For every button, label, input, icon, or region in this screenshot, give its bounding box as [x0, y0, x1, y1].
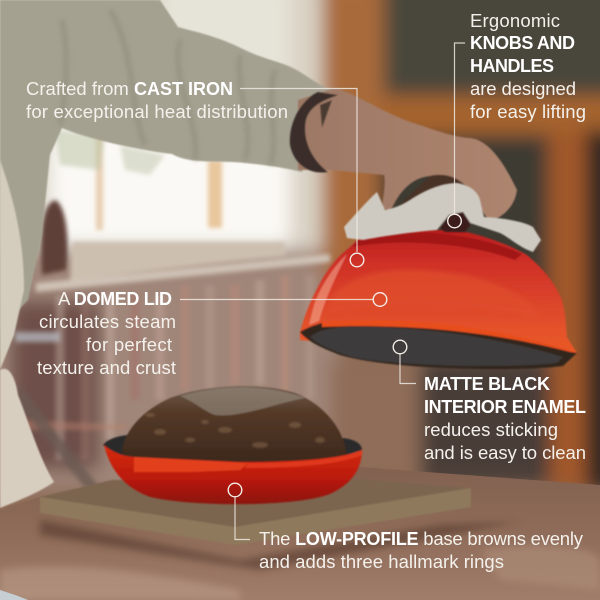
dark interior rim	[103, 435, 362, 470]
sweater	[0, 0, 336, 330]
marker	[373, 293, 387, 306]
label text: are designed	[470, 78, 576, 99]
label text: HANDLES	[470, 56, 554, 76]
label text	[26, 78, 288, 122]
label text: texture and crust	[37, 357, 176, 378]
marker	[393, 340, 407, 354]
callout: matte black interior enamel	[393, 340, 586, 463]
label text: for easy lifting	[470, 101, 586, 122]
apron and figure	[0, 0, 336, 508]
leader line	[400, 354, 416, 384]
label text: and adds three hallmark rings	[259, 551, 504, 572]
label text: reduces sticking	[424, 419, 558, 440]
label text: KNOBS AND	[470, 33, 575, 53]
interior enamel	[300, 322, 577, 369]
towel	[344, 183, 541, 252]
marker	[350, 253, 364, 267]
apron lower	[0, 369, 54, 508]
callout: domed lid	[37, 288, 387, 378]
table	[0, 467, 600, 600]
label text: INTERIOR ENAMEL	[424, 397, 586, 417]
label text: for exceptional heat distribution	[26, 101, 288, 122]
label text: for perfect	[86, 334, 172, 355]
wooden board	[40, 478, 471, 545]
callout: knobs and handles	[448, 10, 586, 228]
leader line	[240, 88, 357, 252]
arm and hand	[290, 88, 517, 222]
marker	[228, 483, 242, 497]
red body	[104, 445, 362, 504]
leader line	[235, 497, 250, 540]
lid	[300, 230, 577, 369]
base with bread	[103, 386, 362, 504]
apron upper	[0, 160, 24, 370]
leader line	[180, 298, 373, 300]
label text: Crafted from CAST IRON	[26, 78, 233, 99]
callout: low-profile base	[228, 483, 584, 572]
label text: Ergonomic	[470, 10, 560, 31]
bread	[122, 386, 347, 470]
label text	[37, 288, 176, 378]
label text: A DOMED LID	[58, 288, 172, 309]
tattoo	[290, 92, 338, 173]
label text	[259, 528, 584, 572]
label text: and is easy to clean	[424, 442, 586, 463]
leader line	[454, 43, 465, 214]
label text	[470, 10, 586, 122]
label text: MATTE BLACK	[424, 374, 550, 394]
callout: cast iron	[26, 78, 364, 267]
marker	[448, 214, 461, 228]
label text: circulates steam	[39, 311, 176, 332]
label text: The LOW-PROFILE base browns evenly	[259, 528, 584, 549]
label text	[424, 374, 586, 463]
